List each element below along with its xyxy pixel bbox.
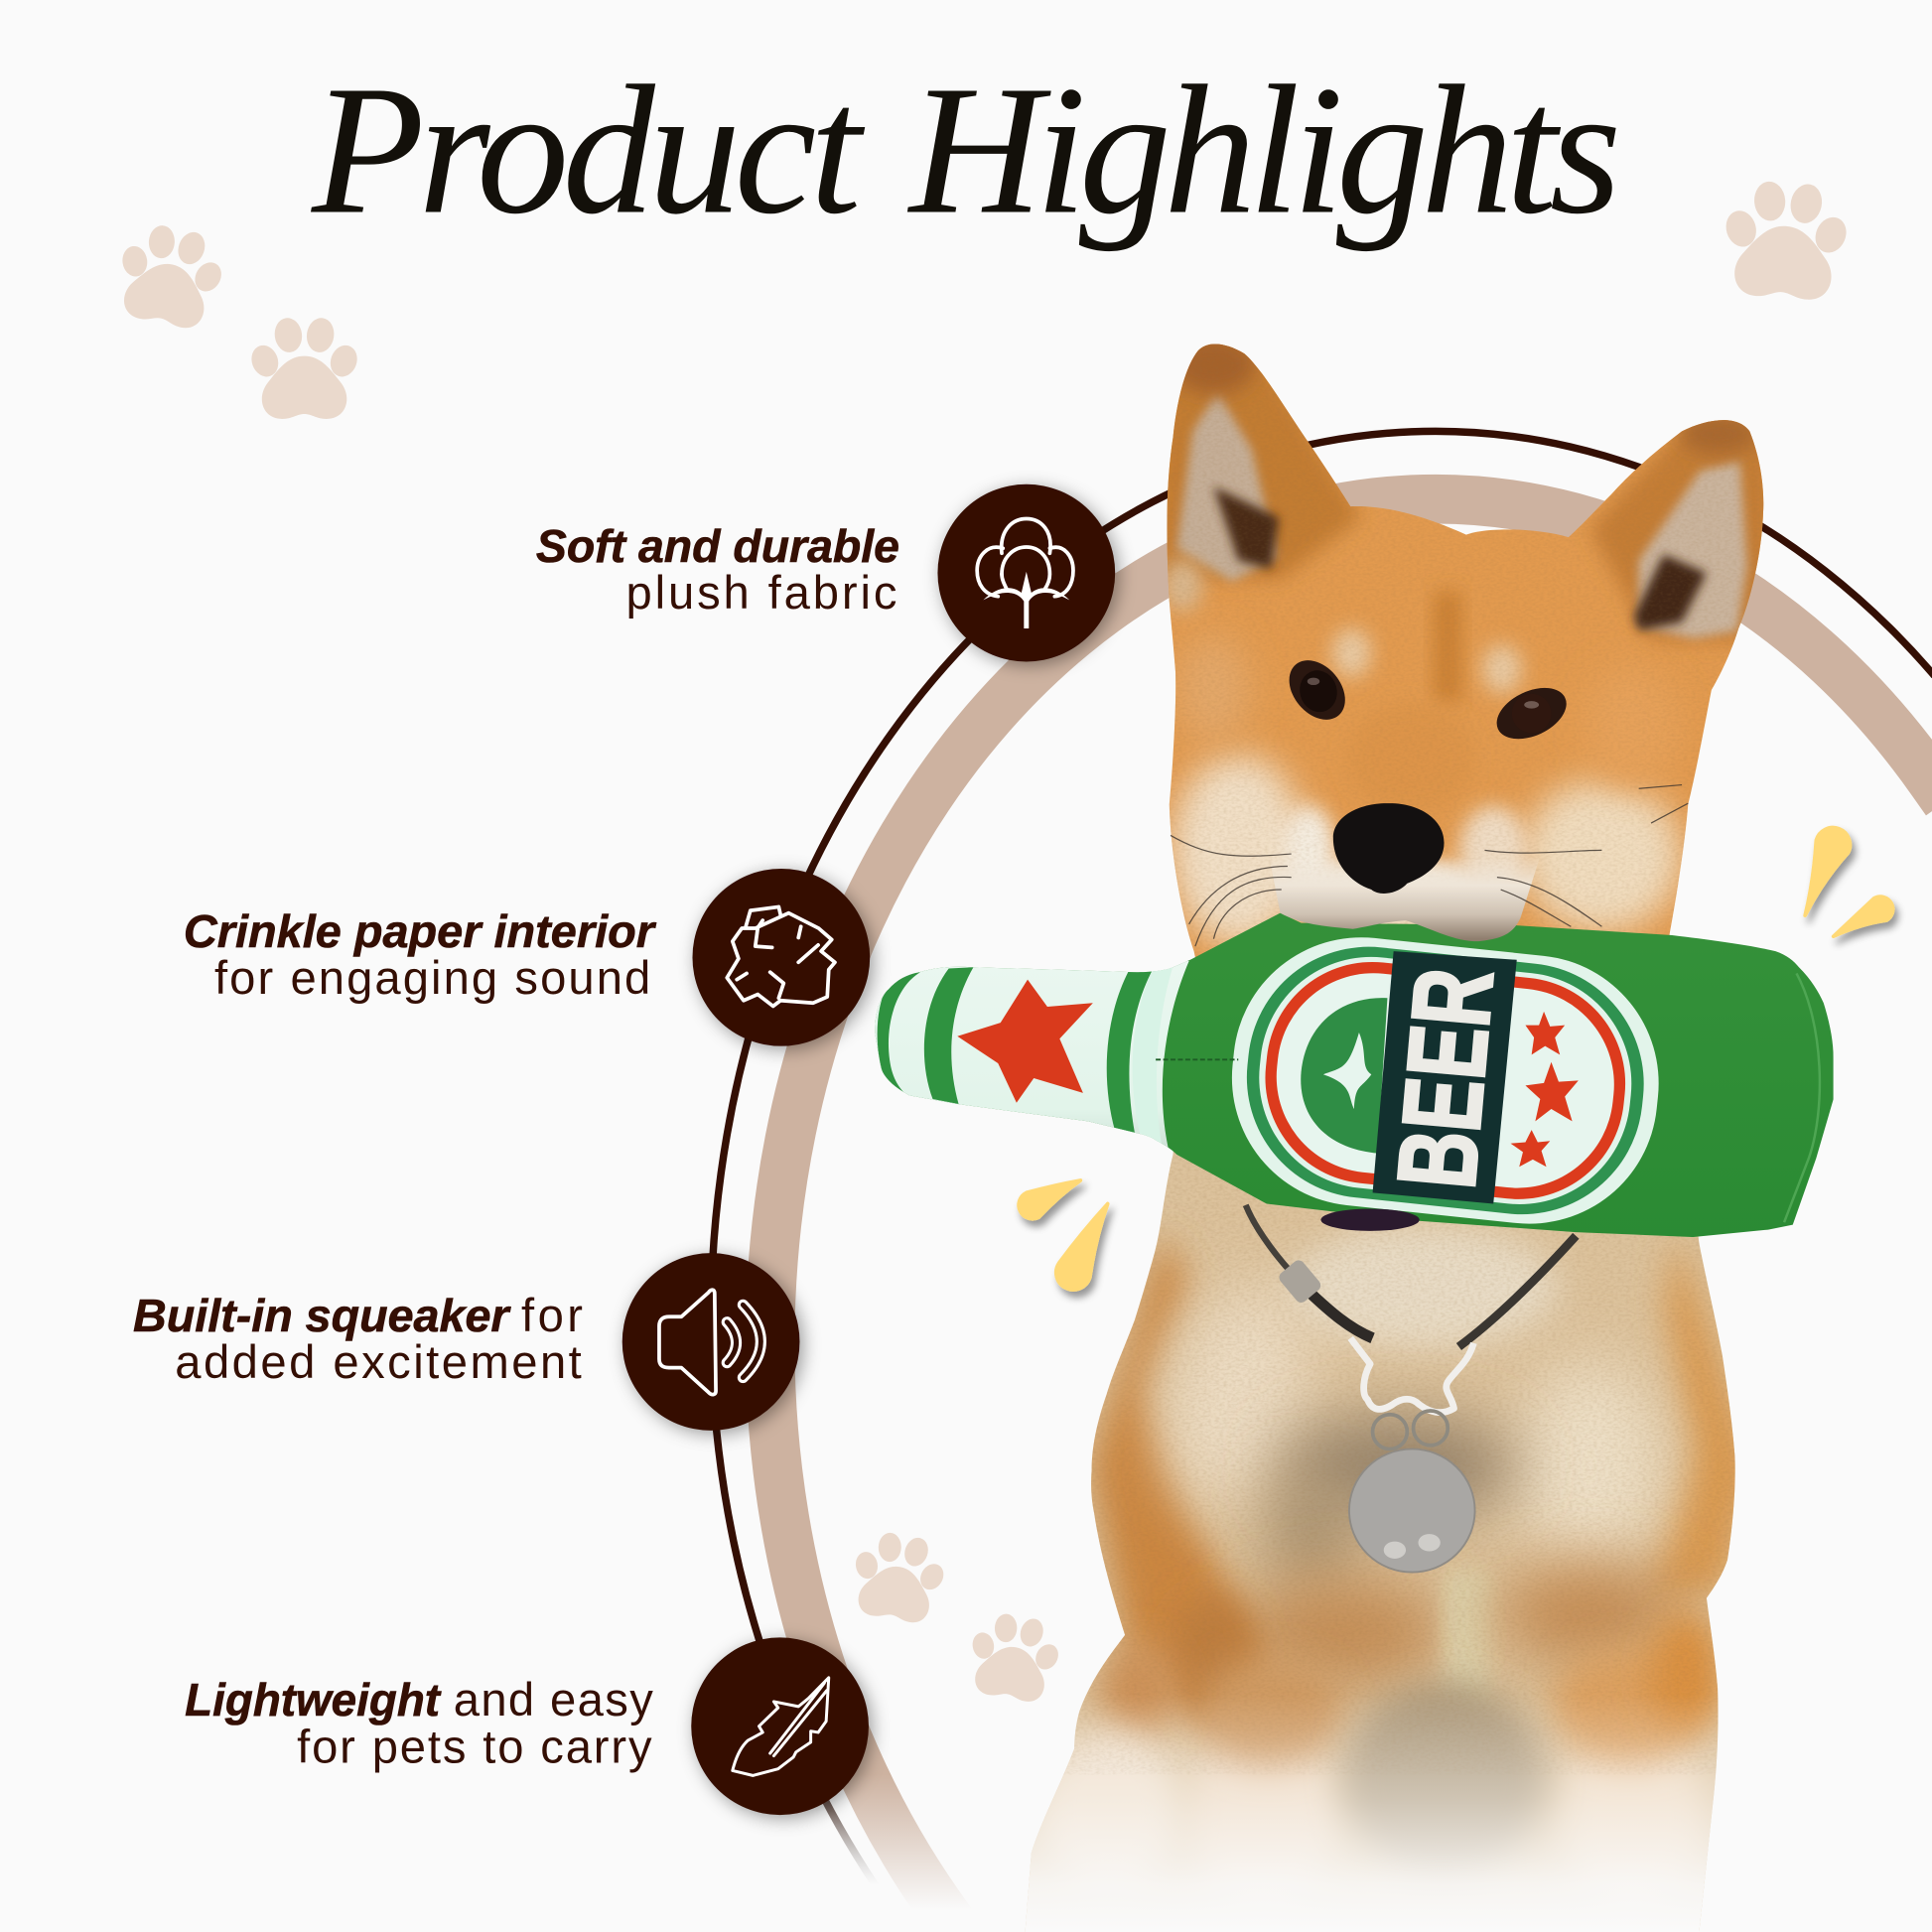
title bbox=[311, 48, 1621, 252]
star on neck bbox=[957, 980, 1093, 1103]
tan ring bbox=[770, 499, 1932, 1903]
text block: lightweight: Lightweight bbox=[185, 1674, 443, 1725]
BEER lettering: BEER bbox=[1374, 964, 1517, 1193]
icon: paw print lower middle bbox=[844, 1526, 953, 1627]
dark thin ring bbox=[711, 431, 1932, 1884]
label oval bbox=[1219, 924, 1671, 1236]
inner green panel bbox=[1301, 998, 1387, 1154]
plush beer bottle bbox=[875, 913, 1834, 1237]
text block: crinkle paper bbox=[184, 905, 657, 1004]
title: Highlights bbox=[907, 48, 1621, 252]
purple collar clip bbox=[1320, 1208, 1420, 1231]
spark marks lower left bbox=[1019, 1180, 1108, 1290]
ear right bbox=[1589, 407, 1774, 640]
text block: soft and durable bbox=[536, 520, 899, 619]
text block: crinkle paper: for engaging sound bbox=[214, 951, 650, 1004]
icon: speaker bbox=[622, 1253, 799, 1431]
dog nose bbox=[1333, 803, 1445, 894]
spark marks upper right bbox=[1805, 828, 1893, 936]
dog head bbox=[1167, 344, 1763, 957]
text block: soft and durable: plush fabric bbox=[625, 566, 897, 619]
icon: paw print top right bbox=[1717, 177, 1855, 302]
whiskers bbox=[1171, 785, 1688, 946]
neck stripes bbox=[878, 972, 920, 1099]
icon: paw print upper left second bbox=[247, 316, 361, 419]
title: Product bbox=[311, 48, 866, 252]
shoulder highlight bbox=[1133, 966, 1173, 1146]
dog eyes bbox=[1278, 649, 1575, 750]
icon: crumpled paper bbox=[692, 869, 870, 1046]
text block: squeaker: for bbox=[521, 1289, 583, 1341]
necklace and tag bbox=[1246, 1205, 1576, 1573]
BEER band bbox=[1373, 951, 1517, 1204]
label stars bbox=[1511, 1012, 1579, 1167]
face colouring bbox=[1171, 592, 1682, 946]
text block: lightweight: and easy bbox=[454, 1673, 653, 1725]
leaf emblem bbox=[1323, 1033, 1371, 1109]
icon: paw print top left bbox=[107, 216, 233, 335]
text block: crinkle paper: Crinkle paper interior bbox=[184, 905, 657, 957]
text block: squeaker bbox=[133, 1289, 583, 1388]
body fur colour areas bbox=[1037, 1226, 1756, 1910]
bottle neck bbox=[863, 961, 1189, 1159]
icon: feather bbox=[691, 1637, 869, 1815]
dog muzzle over bottle bbox=[1269, 857, 1540, 941]
icon: cotton plant bbox=[937, 484, 1115, 661]
text block: soft and durable: Soft and durable bbox=[536, 520, 899, 572]
text block: lightweight: for pets to carry bbox=[297, 1720, 652, 1772]
bottle base seam bbox=[1784, 973, 1820, 1222]
dog body bbox=[1025, 1152, 1735, 1932]
ear left bbox=[1159, 333, 1361, 613]
icon: paw print lower right of ring bbox=[961, 1607, 1067, 1707]
text block: lightweight bbox=[185, 1673, 653, 1772]
text block: squeaker: Built-in squeaker bbox=[133, 1290, 511, 1341]
text block: squeaker: added excitement bbox=[175, 1335, 582, 1388]
panel: feature icon discs bbox=[622, 484, 1115, 1815]
